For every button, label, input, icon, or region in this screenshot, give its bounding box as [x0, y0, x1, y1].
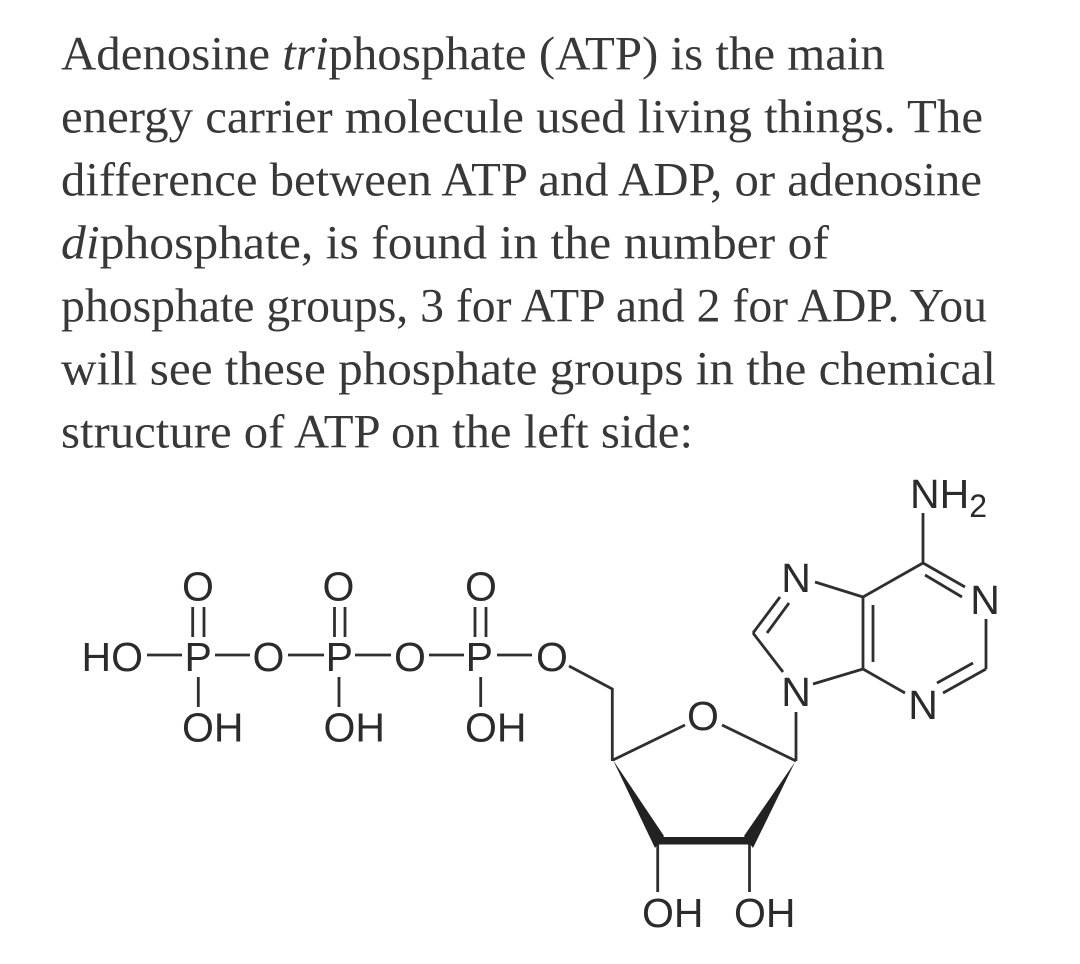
phosphate chain: OH	[324, 704, 385, 750]
phosphate chain: P	[466, 634, 493, 680]
ribose sugar ring: O	[687, 693, 719, 739]
phosphate chain: O	[536, 634, 568, 680]
phosphate chain: P	[326, 634, 353, 680]
phosphate chain: O	[252, 634, 284, 680]
adenine base: 2	[969, 488, 987, 524]
text block: ATP and ADP explanation: difference between ATP and ADP, or adenosine	[61, 154, 982, 206]
phosphate chain: O	[465, 564, 497, 610]
ribose sugar ring	[612, 688, 796, 936]
adenine base: N	[970, 577, 1000, 623]
phosphate chain: OH	[465, 704, 526, 750]
text block: ATP and ADP explanation: diphosphate, is found in the number of	[61, 216, 829, 270]
text block: ATP and ADP explanation: Adenosine triphosphate (ATP) is the main	[61, 28, 885, 80]
text block: ATP and ADP explanation: phosphate groups, 3 for ATP and 2 for ADP. You	[61, 280, 987, 332]
adenine base: N	[781, 669, 811, 715]
phosphate chain: O	[394, 634, 426, 680]
adenine base	[753, 471, 1000, 761]
wedge bonds	[613, 760, 795, 848]
text block: ATP and ADP explanation: structure of ATP on the left side:	[61, 406, 693, 458]
text block: ATP and ADP explanation: will see these phosphate groups in the chemical	[61, 342, 996, 396]
ribose sugar ring: OH	[642, 890, 704, 936]
phosphate chain: O	[182, 564, 214, 610]
phosphate chain: O	[322, 564, 354, 610]
ribose sugar ring: OH	[734, 890, 796, 936]
text block: ATP and ADP explanation	[61, 28, 996, 458]
phosphate chain: HO	[82, 634, 143, 680]
chemical structure of ATP	[82, 471, 1000, 936]
text block: ATP and ADP explanation: energy carrier molecule used living things. The	[61, 90, 983, 144]
phosphate chain	[82, 564, 612, 750]
phosphate chain: OH	[182, 704, 244, 750]
adenine base: N	[781, 555, 811, 601]
phosphate chain: P	[184, 634, 212, 680]
adenine base: N	[908, 682, 938, 728]
adenine base: NH	[910, 471, 969, 517]
